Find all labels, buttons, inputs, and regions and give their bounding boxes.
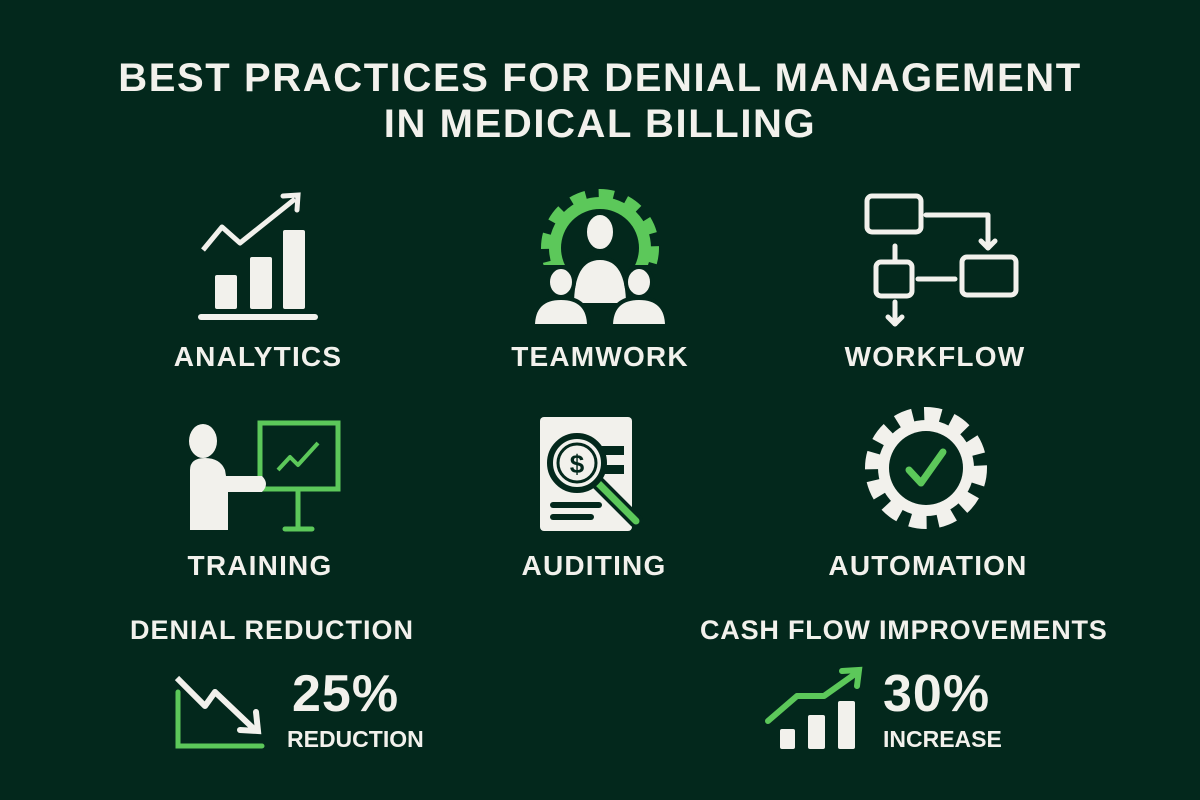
stat: 25% reduction bbox=[287, 665, 424, 752]
label: workflow: WORKFLOW bbox=[845, 341, 1025, 372]
stat: 25% reduction: 25% bbox=[292, 665, 399, 723]
stat: 30% increase bbox=[883, 665, 1002, 752]
icon: analytics bbox=[198, 195, 318, 320]
label: automation: AUTOMATION bbox=[828, 550, 1028, 581]
title: IN MEDICAL BILLING bbox=[384, 102, 816, 146]
title: BEST PRACTICES FOR DENIAL MANAGEMENT bbox=[118, 56, 1082, 100]
stat: 30% increase: 30% bbox=[883, 665, 990, 723]
label: analytics: ANALYTICS bbox=[174, 341, 342, 372]
stat: 25% reduction: REDUCTION bbox=[287, 726, 424, 752]
icon: automation bbox=[874, 416, 978, 520]
heading: denial reduction: DENIAL REDUCTION bbox=[130, 615, 414, 645]
icon: workflow bbox=[867, 196, 1016, 324]
title bbox=[118, 56, 1082, 146]
icon: training bbox=[189, 423, 338, 530]
icon: denial reduction chart bbox=[177, 678, 262, 746]
heading: cash flow improvements: CASH FLOW IMPROVEMENTS bbox=[700, 615, 1108, 645]
label: auditing: AUDITING bbox=[522, 550, 666, 581]
icon: auditing bbox=[540, 417, 636, 531]
icon: auditing: $ bbox=[570, 449, 585, 479]
stat: 30% increase: INCREASE bbox=[883, 726, 1002, 752]
label: teamwork: TEAMWORK bbox=[511, 341, 689, 372]
label: training: TRAINING bbox=[188, 550, 332, 581]
icon: cash flow chart bbox=[768, 670, 859, 749]
icon: teamwork bbox=[533, 198, 667, 335]
